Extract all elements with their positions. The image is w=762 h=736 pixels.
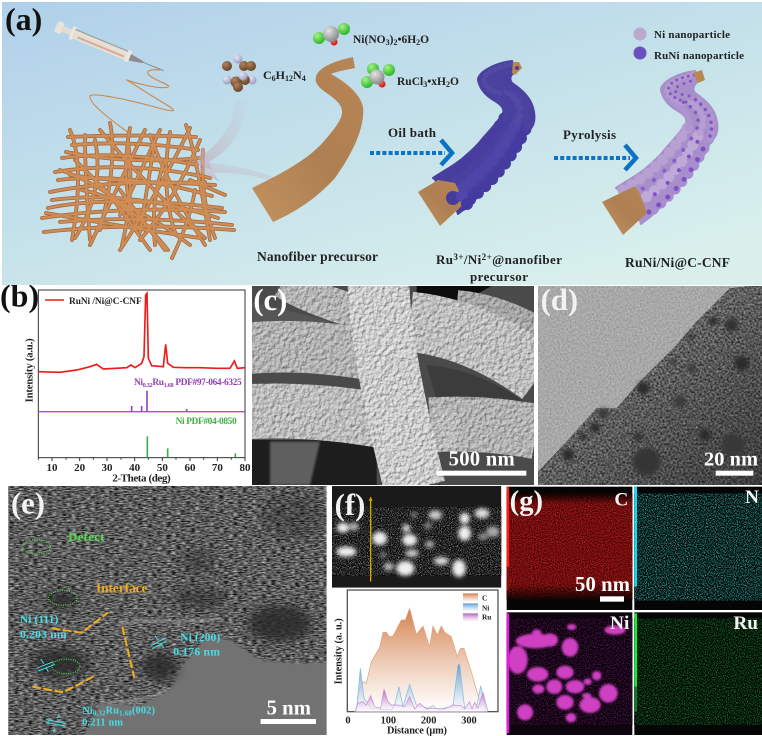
defect label: Defect [68,530,105,544]
HRTEM lattice texture [8,486,327,735]
x axis title: 2-Theta (deg) [112,473,171,485]
label: Ni(NO3)2·6H2O: 2 [393,38,397,47]
map: Ni: Ni [610,613,630,634]
label: RuCl3·xH2O: •xH [427,76,446,88]
chart legend [463,593,491,622]
reference pattern: Ni0.32Ru1.68 [38,378,245,412]
red XRD trace [38,293,245,372]
x tick labels: 40 [129,462,141,474]
reference pattern: Ni0.32Ru1.68: Ni [134,378,143,388]
scale bar: 500 nm: 500 nm [449,449,515,471]
scale bar: 20 nm: 20 nm [704,449,758,471]
map: C: C [614,490,628,511]
molecule: ruthenium chloride [361,63,395,88]
smooth vacuum region [83,635,330,736]
panel (b): XRD pattern [0,278,251,485]
chart legend: C [482,593,487,602]
lattice annotation: Ni0.32Ru1.68 (002): 0.32 [93,709,106,717]
translucent arrow: fiber to mat [197,163,286,186]
plot frame [38,290,245,458]
legend: nanoparticles: Ni nanoparticle [654,29,730,41]
x tick labels: 70 [212,462,223,474]
legend: trace: RuNi /Ni@C-CNF [69,297,142,307]
y axis title: Intensity (a. u.) [333,618,344,684]
label: C6H12N4: N [293,68,302,82]
label: Ni(NO3)2·6H2O: ) [390,34,394,46]
cut end of fiber [418,180,465,226]
C profile [356,608,483,712]
legend: nanoparticles: RuNi nanoparticle [654,50,744,62]
panel (g): EDS elemental maps [506,485,762,735]
label: Ni(NO3)2·6H2O: O [420,34,429,46]
label: Ni(NO3)2·6H2O: •6H [397,34,416,46]
map: N: N [745,487,759,508]
panel (c): SEM image [252,283,534,485]
RuNi/Ni coated fiber [602,70,717,235]
label: C6H12N4: H [276,68,286,82]
panel (e): HRTEM image [8,486,327,735]
arrow: pyrolysis [554,145,636,170]
reference pattern: Ni: Ni PDF#04-0850 [176,417,237,427]
bright rim [100,618,220,702]
lattice annotation: Ni (111): 0.203 nm [20,628,67,641]
dark particles [562,317,749,476]
x tick labels: 30 [102,462,113,474]
x tick labels: 80 [240,462,251,474]
map: Ni [507,612,632,735]
x tick labels: 20 [74,462,86,474]
reference pattern: Ni [147,417,237,458]
molecule: nickel nitrate [313,23,350,46]
panel label (f): (f) [335,488,365,522]
x tick labels: 60 [184,462,196,474]
panel (d): TEM image [538,283,762,485]
x tick labels: 300 [461,716,477,727]
x tick labels: 100 [381,716,396,727]
label: RuCl3·xH2O: 3 [423,80,427,89]
x tick labels: 10 [46,462,58,474]
label: C6H12N4: C [263,68,272,82]
label: Ni(NO3)2·6H2O: Ni(NO [353,34,386,46]
label: Ru3+/Ni2+@nanofiber precursor: /Ni [463,252,482,267]
x tick labels: 50 [157,462,168,474]
scale bar: 5 nm [261,697,316,724]
label: Ru3+/Ni2+@nanofiber precursor: 2+ [482,252,492,262]
label: Ru3+/Ni2+@nanofiber precursor: 3+ [453,252,463,262]
cut end of fiber [602,186,647,235]
spun fibre thread [90,70,174,136]
Ru profile [355,689,488,712]
label: Ru3+/Ni2+@nanofiber precursor: Ru [436,252,453,267]
label: Ni(NO3)2·6H2O: 2 [416,38,420,47]
interface markers [32,612,134,692]
scale bar: 5 nm: 5 nm [267,697,311,719]
plot frame [347,590,498,712]
icon: syringe [53,20,166,77]
panel (f): intensity profile chart [333,589,499,736]
line-scan arrow [369,496,373,582]
lattice annotation: Ni0.32Ru1.68 (002): 0.211 nm [82,718,123,729]
lattice annotation: Ni0.32Ru1.68 (002): (002) [132,706,155,717]
panel label (c): (c) [253,283,287,317]
bright particles [336,508,500,577]
reference pattern: Ni0.32Ru1.68: Ru [152,378,164,388]
panel (a): synthesis schematic [2,1,762,285]
legend: nanoparticles [634,28,744,62]
label: Ru3+/Ni2+@nanofiber precursor: @nanofiber [492,252,562,267]
panel label (b): (b) [0,278,39,314]
lattice annotation: Ni (111) [20,614,67,672]
interface label: Interface [96,580,148,595]
label: Ru3+/Ni2+@nanofiber precursor [436,252,562,284]
panel label (e): (e) [11,486,45,520]
lattice annotation: Ni (200): 0.176 nm [173,646,220,659]
label: C6H12N4: 4 [302,74,306,83]
map: Ru: Ru [733,613,758,634]
SEM nanofibers [247,282,540,488]
label: C6H12N4: 12 [285,74,293,83]
scale bar: 500 nm [437,449,526,476]
reference pattern: Ni0.32Ru1.68: 0.32 [143,382,153,389]
label: RuCl3·xH2O: 2 [446,80,450,89]
reference pattern: Ni0.32Ru1.68: 1.68 [164,382,174,389]
panel label (d): (d) [541,283,578,317]
lattice annotation: Ni0.32Ru1.68 (002) [45,706,155,732]
chart legend: Ni [482,603,489,612]
x tick labels [345,716,477,727]
label: Ru3+/Ni2+@nanofiber precursor: precursor [470,269,528,284]
x tick labels: 0 [345,716,351,727]
lattice annotation: Ni0.32Ru1.68 (002): 1.68 [119,709,132,717]
reference pattern: Ni0.32Ru1.68: PDF#97-064-6325 [173,378,242,388]
defect markers [23,539,80,674]
x axis title: Distance (μm) [387,725,447,736]
translucent arrow: molecule to mat [197,100,246,170]
panel (a) background [2,2,762,285]
panel label (a): (a) [5,1,42,37]
label: Pyrolysis: Pyrolysis [563,127,616,142]
panel label (g): (g) [510,485,543,517]
lattice annotation: Ni (111): Ni (111) [20,614,59,626]
arrow: oil bath [370,140,452,165]
Ni profile [356,664,486,712]
label: RuNi/Ni@C-CNF: RuNi/Ni@C-CNF [625,255,730,270]
lattice annotation: Ni (200) [151,632,220,659]
label: Oil bath: Oil bath [388,125,437,140]
nanofiber precursor [252,57,363,222]
map: Ru [634,612,762,735]
lattice annotation: Ni (200): Ni (200) [180,632,220,644]
x axis ticks [38,458,245,461]
chart legend: Ru [482,613,491,622]
label: Ni(NO3)2·6H2O: 3 [386,38,390,47]
dark nanoparticles [32,493,323,681]
map: C [507,487,632,610]
TEM background [538,285,762,485]
nanofiber mat [42,123,234,258]
map: N [634,487,762,610]
TEM fiber body [538,285,762,485]
label: RuCl3·xH2O: RuCl [397,76,423,88]
label: RuCl3·xH2O: O [450,76,459,88]
x tick labels [46,462,251,474]
Ru/Ni coated fiber [418,61,534,226]
lattice annotation: Ni0.32Ru1.68 (002): Ru [106,706,119,717]
molecule: C6H12N4 [222,54,256,92]
label: C6H12N4: 6 [272,74,276,83]
map: C: 50 nm [575,574,630,596]
x tick labels: 200 [421,716,436,727]
panel (f): line-scan image [332,486,502,588]
y axis title: Intensity (a.u.) [25,338,36,402]
STEM background [332,486,501,588]
lattice annotation: Ni0.32Ru1.68 (002): Ni [82,706,93,717]
SEM dark background [250,285,537,488]
label: Nanofiber precursor: Nanofiber precursor [257,249,378,264]
